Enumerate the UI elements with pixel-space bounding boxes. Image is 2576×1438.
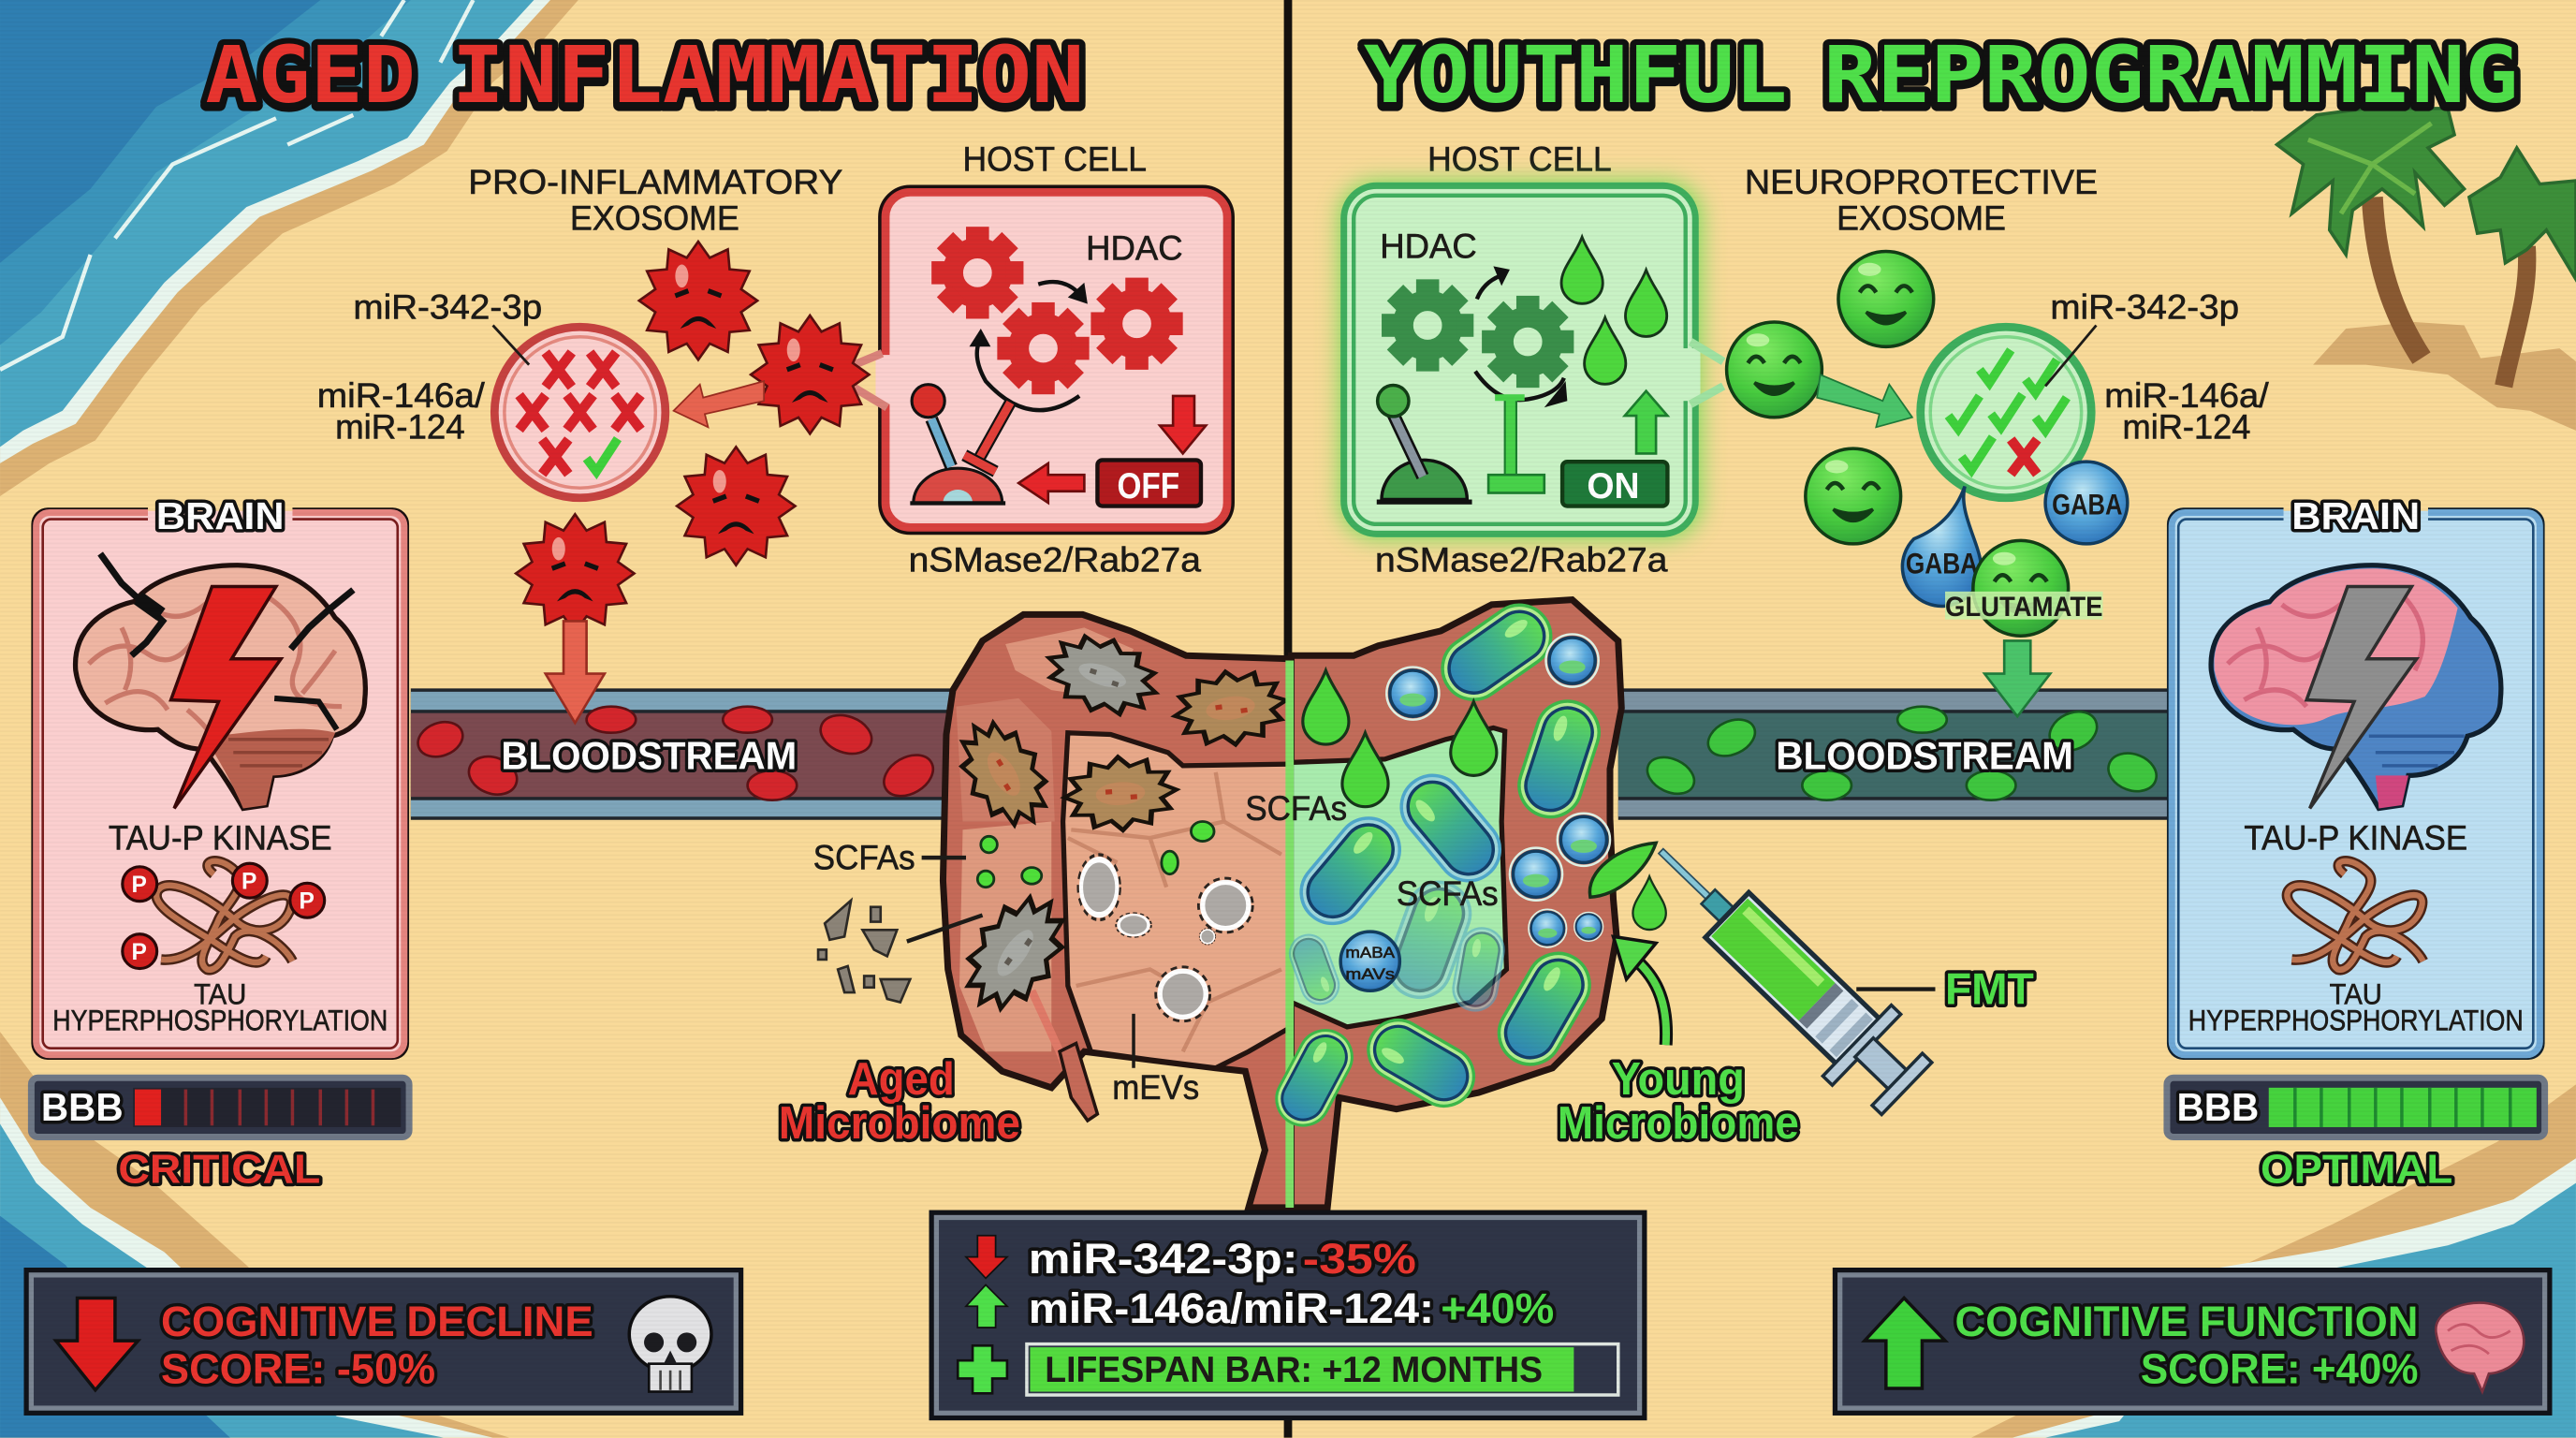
green drops xyxy=(1303,670,1497,807)
off badge: OFF xyxy=(1117,466,1179,506)
arrow: exosome to bloodstream xyxy=(546,621,605,723)
status: critical: CRITICAL xyxy=(118,1147,320,1193)
debris xyxy=(818,901,910,1003)
labels in gut: mEVs xyxy=(1112,1068,1199,1107)
text: cognitive decline score xyxy=(161,1298,593,1393)
droplets xyxy=(1561,237,1667,384)
heading: host cell left: HOST CELL xyxy=(963,140,1147,179)
label: nSMase2 right: nSMase2/Rab27a xyxy=(1375,541,1668,580)
panel: cognitive function xyxy=(1835,1270,2550,1413)
mABA mAVs vesicle: mABA xyxy=(1345,944,1396,961)
up arrow xyxy=(1625,391,1667,453)
panel: brain aged xyxy=(31,494,409,1060)
label: tau hyperphosphorylation xyxy=(2188,976,2524,1036)
heading: neuroprotective exosome xyxy=(1745,163,2098,238)
label: tau hyperphosphorylation: HYPERPHOSPHORYLATION xyxy=(2188,1003,2524,1036)
off badge xyxy=(1097,460,1201,506)
label: bloodstream: BLOODSTREAM xyxy=(501,733,797,777)
title: youthful reprogramming: REPROGRAMMING xyxy=(1823,29,2519,121)
labels: miRNA left: miR-146a/ xyxy=(317,376,486,415)
tau tangle with phosphates: P xyxy=(242,869,256,894)
text: cognitive function score: COGNITIVE FUNCTION xyxy=(1955,1298,2418,1345)
gears xyxy=(1382,279,1573,388)
label: tau hyperphosphorylation xyxy=(52,976,388,1036)
label: aged microbiome: Aged xyxy=(848,1054,955,1105)
arrow down xyxy=(56,1298,138,1390)
text: cognitive decline score: SCORE: -50% xyxy=(161,1345,435,1393)
stat: miR-342-3p xyxy=(1029,1235,1416,1283)
title: aged inflammation: INFLAMMATION xyxy=(452,29,1084,121)
BBB bar aged xyxy=(31,1078,409,1137)
brain illustration healthy xyxy=(2211,565,2501,808)
label: aged microbiome: Microbiome xyxy=(779,1098,1020,1149)
glutamate exosome: GLUTAMATE xyxy=(1945,592,2102,623)
arrow: exosome to cargo xyxy=(1817,374,1912,427)
heading: neuroprotective exosome: EXOSOME xyxy=(1837,199,2006,238)
text: cognitive decline score: COGNITIVE DECLINE xyxy=(161,1298,593,1345)
heading: pro-inflammatory exosome: PRO-INFLAMMATORY xyxy=(468,163,842,201)
label: HDAC: HDAC xyxy=(1086,228,1183,267)
off arrows xyxy=(1018,396,1206,503)
tau tangle with phosphates: P xyxy=(299,889,315,915)
icon: plus xyxy=(958,1345,1007,1393)
panel: host cell youthful xyxy=(1339,181,1723,539)
text: cognitive function score xyxy=(1955,1298,2418,1393)
grey vesicles xyxy=(1078,855,1252,1021)
lifespan bar xyxy=(1027,1344,1618,1395)
lever xyxy=(910,385,1010,506)
heading: brain: BRAIN xyxy=(156,494,285,537)
arrow: exosome to cargo xyxy=(674,381,764,427)
leaf and droplet xyxy=(1589,843,1666,930)
label: nSMase2 left: nSMase2/Rab27a xyxy=(909,541,1202,580)
status: optimal: OPTIMAL xyxy=(2261,1147,2452,1193)
right bloodstream vessel xyxy=(1618,688,2169,820)
mABA mAVs vesicle: mAVs xyxy=(1345,965,1395,983)
rotation arrows xyxy=(1475,266,1567,407)
syringe FMT xyxy=(1627,815,1941,1124)
BBB bar aged: BBB xyxy=(41,1085,124,1129)
BBB bar youthful xyxy=(2167,1078,2545,1137)
beach scene: bottom-left sea xyxy=(0,1032,509,1438)
icon: skull xyxy=(629,1297,711,1392)
labels in gut xyxy=(813,789,1499,1107)
label: FMT: FMT xyxy=(1945,964,2034,1014)
labels: miRNA right: miR-342-3p xyxy=(2050,287,2239,326)
gut: young half xyxy=(1267,593,1621,1208)
GABA vesicle 2: GABA xyxy=(1906,547,1978,580)
labels in gut: SCFAs xyxy=(1397,874,1499,913)
BBB bar youthful: BBB xyxy=(2176,1085,2259,1129)
title: aged inflammation: AGED xyxy=(205,29,416,121)
label: tau hyperphosphorylation: TAU xyxy=(194,976,246,1010)
heading: host cell right: HOST CELL xyxy=(1427,140,1612,179)
neuroprotective exosomes xyxy=(1727,252,1934,544)
brain illustration cracked xyxy=(76,553,365,808)
label: tau-p kinase: TAU-P KINASE xyxy=(109,818,332,857)
bacteria faded xyxy=(1284,873,1507,1014)
stat: miR-146a/miR-124: +40% xyxy=(1441,1284,1554,1332)
heading: pro-inflammatory exosome xyxy=(468,163,842,238)
beach scene: top-left sea xyxy=(0,0,578,496)
on badge xyxy=(1562,462,1667,506)
label: tau hyperphosphorylation: TAU xyxy=(2330,976,2382,1010)
title: youthful reprogramming xyxy=(1364,29,2519,121)
heading: neuroprotective exosome: NEUROPROTECTIVE xyxy=(1745,163,2098,201)
labels: miRNA left: miR-342-3p xyxy=(353,287,542,326)
labels in gut: SCFAs xyxy=(813,838,915,876)
labels in gut: SCFAs xyxy=(1245,789,1347,828)
glutamate exosome xyxy=(1945,540,2102,636)
panel: host cell aged xyxy=(855,187,1232,533)
young bacteria xyxy=(1267,593,1607,1135)
blue spheres xyxy=(1386,634,1610,947)
tau protein tangle xyxy=(2287,861,2423,970)
heading: pro-inflammatory exosome: EXOSOME xyxy=(570,199,739,238)
gut: aged half xyxy=(943,614,1292,1208)
on badge: ON xyxy=(1587,466,1640,506)
GABA vesicle 2 xyxy=(1902,486,1982,607)
text: cognitive function score: SCORE: +40% xyxy=(2141,1345,2418,1393)
GABA vesicle 1: GABA xyxy=(2052,487,2123,521)
title: youthful reprogramming: YOUTHFUL xyxy=(1364,29,1788,121)
title: aged inflammation xyxy=(205,29,1084,121)
label: tau hyperphosphorylation: HYPERPHOSPHORYLATION xyxy=(52,1003,388,1036)
labels: miRNA right: miR-146a/ xyxy=(2104,376,2270,415)
arrow: exosome to bloodstream xyxy=(1984,640,2050,716)
aged bacteria xyxy=(943,624,1291,1027)
stat: miR-342-3p: miR-342-3p: xyxy=(1029,1235,1298,1283)
tau tangle with phosphates: P xyxy=(131,940,147,965)
heading: brain: BRAIN xyxy=(2291,494,2420,537)
label: bloodstream: BLOODSTREAM xyxy=(1776,733,2073,777)
center divider xyxy=(1284,0,1292,1438)
panel: brain youthful xyxy=(2167,494,2545,1060)
label: young microbiome xyxy=(1558,1054,1799,1149)
stat: miR-342-3p: -35% xyxy=(1303,1235,1416,1283)
rotation arrows xyxy=(970,282,1088,410)
label: young microbiome: Microbiome xyxy=(1558,1098,1799,1149)
arrow up xyxy=(1865,1298,1945,1388)
beach scene: bottom-right sea xyxy=(1971,1084,2576,1438)
panel: cognitive decline xyxy=(26,1270,741,1413)
cargo circle youthful xyxy=(1921,327,2091,498)
panel: summary stats xyxy=(931,1212,1645,1418)
labels: miRNA left: miR-124 xyxy=(335,408,465,447)
tau tangle with phosphates: P xyxy=(131,873,147,898)
mABA mAVs vesicle xyxy=(1340,932,1399,990)
icon: pink brain xyxy=(2436,1303,2524,1392)
beach scene: palm trees xyxy=(2277,109,2576,431)
labels: miRNA left xyxy=(317,287,542,447)
arrow up xyxy=(966,1284,1007,1328)
pro-inflammatory exosomes xyxy=(516,242,869,633)
label: HDAC: HDAC xyxy=(1380,227,1477,266)
left bloodstream vessel xyxy=(411,688,961,820)
labels: miRNA right xyxy=(2045,287,2270,447)
tau tangle with phosphates xyxy=(123,861,325,970)
arrow down xyxy=(966,1236,1007,1278)
stat: miR-146a/miR-124: miR-146a/miR-124: xyxy=(1029,1284,1434,1332)
gears xyxy=(931,227,1183,394)
label: tau-p kinase: TAU-P KINASE xyxy=(2244,818,2467,857)
label: aged microbiome xyxy=(779,1054,1020,1149)
GABA vesicle 1 xyxy=(2045,462,2128,544)
lever xyxy=(1377,386,1544,505)
labels: miRNA right: miR-124 xyxy=(2123,408,2250,447)
lifespan bar: LIFESPAN BAR: +12 MONTHS xyxy=(1045,1350,1543,1390)
curved arrow to gut xyxy=(1613,936,1666,1045)
label: young microbiome: Young xyxy=(1612,1054,1745,1105)
cargo circle aged xyxy=(494,327,666,498)
green short-chain fatty acid specks xyxy=(977,822,1214,888)
